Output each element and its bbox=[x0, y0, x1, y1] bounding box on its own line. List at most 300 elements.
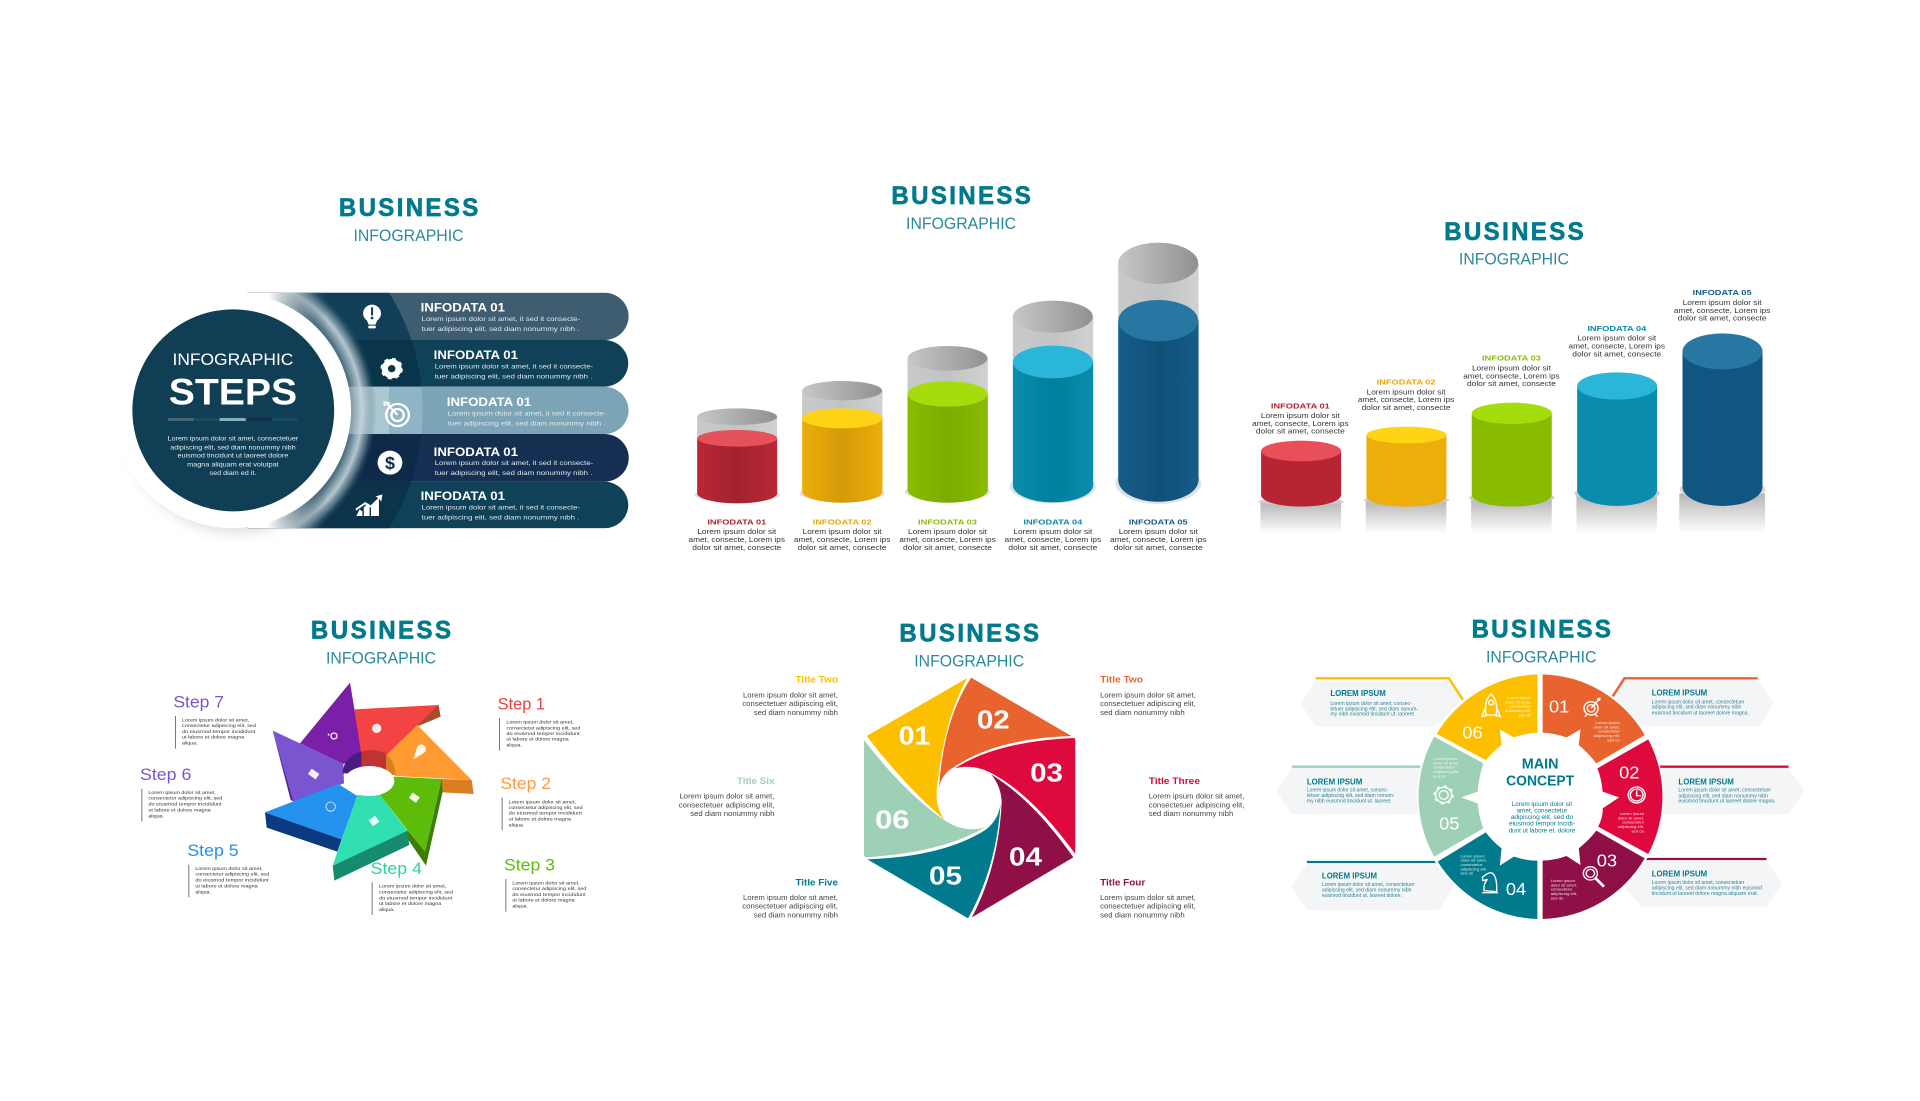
step 5 bbox=[187, 841, 270, 897]
cylinder 3 bbox=[1469, 403, 1555, 533]
mini text 06: sed do bbox=[1519, 712, 1532, 717]
main concept text bbox=[1506, 756, 1576, 834]
step 1: do eiusmod tempor incididunt bbox=[506, 731, 580, 737]
callout: title two left: Title Two bbox=[795, 675, 838, 685]
card: 02: adipiscing elit, sed diam nonummy nibh bbox=[1678, 793, 1768, 799]
icon: target bbox=[384, 401, 409, 426]
mini text 04: consectetur bbox=[1461, 862, 1483, 867]
step 6 bbox=[140, 765, 223, 821]
row 4 text: Lorem ipsum dolor sit amet, it sed it consecte- bbox=[435, 460, 593, 467]
row 5 text: Lorem ipsum dolor sit amet, it sed it consecte- bbox=[422, 505, 580, 512]
step 1: aliqua. bbox=[506, 743, 522, 749]
label 5: INFODATA 05 bbox=[1693, 288, 1752, 297]
card: 05: Lorem ipsum dolor sit amet, consec- bbox=[1307, 788, 1389, 794]
label 3 bbox=[1463, 354, 1560, 388]
wheel bbox=[1417, 673, 1664, 921]
label 3: amet, consecte, Lorem ips bbox=[1463, 372, 1560, 380]
heading: business infographic bbox=[311, 617, 451, 667]
step 2: aliqua. bbox=[509, 822, 524, 828]
centre paragraph: euismod tincidunt ut laoreet dolore bbox=[177, 453, 289, 460]
segment 02 bbox=[1597, 739, 1662, 854]
heading: business infographic bbox=[899, 620, 1039, 670]
step 5: Lorem ipsum dolor sit amet, bbox=[195, 866, 263, 872]
mini text 02: adipiscing elit, bbox=[1618, 824, 1644, 829]
step 3: Lorem ipsum dolor sit amet, bbox=[512, 880, 580, 886]
card: 01 bbox=[1612, 678, 1774, 726]
label 3: amet, consecte, Lorem ips bbox=[899, 535, 996, 544]
panel: seven step pinwheel bbox=[140, 617, 587, 915]
centre paragraph: sed diam ed it. bbox=[210, 470, 257, 477]
row 5 text: tuer adipiscing elit, sed diam nonummy nibh . bbox=[422, 515, 579, 522]
icon: growth chart bbox=[356, 494, 382, 516]
main concept text: adipiscing elit, sed do bbox=[1511, 814, 1574, 821]
label 1: Lorem ipsum dolor sit bbox=[697, 527, 777, 536]
step 4: consectetur adipiscing elit, sed bbox=[379, 889, 453, 895]
label 5: dolor sit amet, consecte bbox=[1114, 543, 1203, 552]
mini text 03 bbox=[1551, 878, 1577, 900]
callout: title six: Title Six bbox=[737, 777, 775, 787]
mini text 04: sed do bbox=[1461, 871, 1474, 876]
band stack bbox=[248, 292, 629, 528]
row 4 text bbox=[434, 445, 593, 477]
row 2 text: INFODATA 01 bbox=[434, 348, 518, 362]
heading: business infographic: BUSINESS bbox=[1444, 218, 1584, 246]
label 2: Lorem ipsum dolor sit bbox=[803, 527, 882, 536]
mini text 04: dolor sit amet, bbox=[1461, 858, 1487, 863]
label 3: INFODATA 03 bbox=[918, 518, 978, 526]
callout: title six: consectetuer adipiscing elit, bbox=[679, 801, 774, 809]
heading: business infographic: INFOGRAPHIC bbox=[1486, 648, 1596, 667]
heading: business infographic: BUSINESS bbox=[891, 182, 1031, 210]
mini text 06: adipiscing elit, bbox=[1505, 708, 1531, 713]
mini text 06: consectetur bbox=[1510, 704, 1532, 709]
hole bbox=[344, 766, 394, 796]
blade sides bbox=[265, 704, 474, 881]
blade: step 4 bbox=[333, 795, 407, 866]
label 1: Lorem ipsum dolor sit bbox=[1261, 411, 1341, 420]
cylinder 2 bbox=[1364, 427, 1449, 533]
step 5: aliqua. bbox=[195, 889, 211, 895]
row 2 text bbox=[434, 348, 593, 380]
mini text 05: dolor sit amet, bbox=[1433, 760, 1460, 765]
mini text 04: Lorem ipsum bbox=[1461, 853, 1485, 858]
centre title: STEPS bbox=[169, 372, 297, 413]
callout: title two left bbox=[742, 675, 838, 717]
mini text 05: Lorem ipsum bbox=[1433, 756, 1458, 761]
mini text 02: dolor sit amet, bbox=[1618, 815, 1644, 820]
icon: dollar: $ bbox=[385, 453, 395, 473]
heading: business infographic: INFOGRAPHIC bbox=[914, 652, 1024, 670]
card: 05: tetuer adipiscing elit, sed diam nonum- bbox=[1307, 793, 1395, 799]
callout: title three: consectetuer adipiscing elit, bbox=[1149, 801, 1244, 809]
step 2 bbox=[500, 774, 583, 830]
centre title: INFOGRAPHIC bbox=[172, 350, 293, 369]
cylinder 1 bbox=[1258, 441, 1344, 533]
card: 02 bbox=[1656, 767, 1804, 814]
callout: title five: Lorem ipsum dolor sit amet, bbox=[743, 893, 838, 902]
step 3: aliqua. bbox=[512, 903, 528, 909]
mini text 02: Lorem ipsum bbox=[1620, 811, 1645, 816]
colour dashes bbox=[168, 418, 298, 421]
row 1 text: Lorem ipsum dolor sit amet, it sed it consecte- bbox=[422, 316, 580, 323]
step 7: ut labore et dolore magna bbox=[182, 735, 245, 741]
callout: title six bbox=[679, 777, 775, 818]
mini text 04 bbox=[1461, 853, 1487, 876]
mini text 01: Lorem ipsum bbox=[1596, 720, 1620, 725]
mini text 04: adipiscing elit, bbox=[1461, 866, 1487, 871]
heading: business infographic bbox=[891, 182, 1031, 233]
segment numbers: 05 bbox=[1439, 814, 1460, 833]
step 3: Step 3 bbox=[504, 856, 555, 875]
callout: title four: Lorem ipsum dolor sit amet, bbox=[1100, 893, 1196, 902]
blade: step 7 bbox=[300, 683, 362, 764]
segment numbers: 04 bbox=[1009, 842, 1042, 871]
label 5: amet, consecte, Lorem ips bbox=[1674, 306, 1770, 315]
row 3 text: INFODATA 01 bbox=[447, 395, 531, 409]
step 6: Step 6 bbox=[140, 765, 191, 784]
step 1: Step 1 bbox=[498, 694, 545, 713]
card: 03: tincidunt ut laoreet dolore magna aliquam erat. bbox=[1652, 891, 1758, 897]
label 1: dolor sit amet, consecte bbox=[692, 543, 782, 552]
cylinder 4 bbox=[1010, 301, 1096, 503]
heading: business infographic: BUSINESS bbox=[899, 620, 1039, 648]
label 4: INFODATA 04 bbox=[1023, 518, 1083, 526]
row 5 text bbox=[421, 489, 580, 522]
label 1: INFODATA 01 bbox=[707, 518, 767, 526]
panel: main concept wheel bbox=[1276, 616, 1804, 921]
card: 03: Lorem ipsum dolor sit amet, consectetuer bbox=[1652, 880, 1745, 886]
segment numbers: 06 bbox=[875, 805, 910, 834]
step 7: Step 7 bbox=[173, 692, 224, 711]
mini text 03: Lorem ipsum bbox=[1551, 878, 1576, 883]
mini text 02 bbox=[1618, 811, 1645, 833]
segment numbers: 05 bbox=[929, 861, 962, 890]
step 7: Lorem ipsum dolor sit amet, bbox=[182, 717, 249, 723]
step 4: do eiusmod tempor incididunt bbox=[379, 895, 453, 901]
step 7 bbox=[173, 692, 256, 749]
step 7: consectetur adipiscing elit, sed bbox=[182, 723, 256, 729]
cylinder 3 bbox=[905, 346, 990, 503]
card: 04: LOREM IPSUM bbox=[1322, 872, 1377, 881]
step 2: Lorem ipsum dolor sit amet, bbox=[509, 799, 576, 805]
heading: business infographic: BUSINESS bbox=[339, 194, 478, 222]
step 3: ut labore et dolore magna bbox=[512, 898, 575, 904]
label 1 bbox=[1252, 402, 1349, 436]
step 6: consectetur adipiscing elit, sed bbox=[148, 796, 223, 802]
segment 04 bbox=[1438, 832, 1537, 919]
cylinder 4 bbox=[1574, 372, 1660, 533]
heading: business infographic: BUSINESS bbox=[311, 617, 451, 644]
callout: title two right: sed diam nonummy nibh bbox=[1100, 708, 1185, 717]
callout: title five: consectetuer adipiscing elit, bbox=[742, 902, 838, 911]
mini text 01 bbox=[1593, 720, 1621, 742]
label 2 bbox=[1358, 378, 1454, 412]
main concept text: eiusmod tempor incidi- bbox=[1509, 821, 1575, 828]
label 3 bbox=[899, 518, 996, 552]
label 5 bbox=[1110, 518, 1206, 552]
step 1 bbox=[498, 694, 581, 751]
label 5: Lorem ipsum dolor sit bbox=[1683, 298, 1762, 307]
step 4: ut labore et dolore magna bbox=[379, 901, 442, 907]
cylinder 5 bbox=[1679, 333, 1765, 533]
card: 01: Lorem ipsum dolor sit amet, consectetuer bbox=[1652, 699, 1745, 705]
card: 06: my nibh euismod tincidunt ut. laoreet bbox=[1330, 712, 1414, 718]
labels bbox=[689, 518, 1206, 552]
label 5: amet, consecte, Lorem ips bbox=[1110, 535, 1206, 544]
row 3 text: tuer adipiscing elit, sed diam nonummy nibh . bbox=[448, 420, 606, 427]
heading: business infographic: INFOGRAPHIC bbox=[353, 226, 464, 245]
label 1: INFODATA 01 bbox=[1271, 402, 1330, 410]
mini text 05: consectetur bbox=[1433, 765, 1456, 770]
mini texts bbox=[1433, 695, 1645, 900]
segment numbers: 04 bbox=[1506, 879, 1526, 899]
callout: title two right: consectetuer adipiscing elit, bbox=[1100, 699, 1196, 708]
row 3 text bbox=[447, 395, 606, 427]
blade icons bbox=[308, 724, 426, 826]
segment numbers: 03 bbox=[1597, 851, 1617, 871]
mini text 01: consectetur bbox=[1598, 729, 1620, 734]
label 1: amet, consecte, Lorem ips bbox=[689, 535, 785, 544]
main concept text: dunt ut labore et. dolore bbox=[1509, 827, 1576, 834]
card: 05: my nibh euismod tincidunt ut. laoreet bbox=[1307, 799, 1391, 805]
icon: target bbox=[1584, 698, 1600, 717]
card: 06: Lorem ipsum dolor sit amet, consec- bbox=[1330, 701, 1412, 707]
segment 02 bbox=[939, 678, 1071, 788]
icon: gear bbox=[1435, 786, 1453, 804]
label 2: INFODATA 02 bbox=[813, 518, 872, 526]
card: 04 bbox=[1291, 862, 1454, 910]
card: 01: adipiscing elit, sed diam nonummy nibh bbox=[1652, 705, 1741, 711]
segment numbers: 01 bbox=[1549, 697, 1569, 716]
segment 05 bbox=[1419, 737, 1483, 857]
callout: title four: sed diam nonummy nibh bbox=[1100, 911, 1185, 919]
label 3: dolor sit amet, consecte bbox=[903, 543, 993, 552]
segment 03 bbox=[955, 738, 1075, 854]
panel: infographic steps bbox=[132, 198, 629, 538]
mini text 03: sed do bbox=[1551, 895, 1564, 900]
segment 04 bbox=[972, 774, 1073, 917]
card: 03 bbox=[1624, 859, 1782, 907]
mini text 01: adipiscing elit, bbox=[1593, 733, 1620, 738]
main concept text: amet, consectetur bbox=[1516, 807, 1567, 814]
card: 05 bbox=[1276, 767, 1424, 814]
row 1 text bbox=[421, 301, 580, 333]
step 2: consectetur adipiscing elit, sed bbox=[509, 805, 583, 811]
step 3: do eiusmod tempor incididunt bbox=[512, 892, 586, 898]
segment numbers bbox=[1439, 697, 1639, 899]
callout: title two left: Lorem ipsum dolor sit amet, bbox=[743, 691, 838, 699]
segment 01 bbox=[1543, 674, 1645, 763]
step 7: do eiusmod tempor incididunt bbox=[182, 729, 256, 735]
circle shadow bbox=[129, 330, 346, 533]
callout: title five: sed diam nonummy nibh bbox=[754, 911, 838, 919]
icon: bulb bbox=[363, 305, 381, 328]
blade: step 3 bbox=[380, 777, 442, 852]
label 1: dolor sit amet, consecte bbox=[1256, 427, 1345, 436]
mini text 03: dolor sit amet, bbox=[1551, 882, 1577, 887]
step 4: Lorem ipsum dolor sit amet, bbox=[379, 884, 446, 890]
mini text 06 bbox=[1505, 695, 1532, 717]
callout: title four: Title Four bbox=[1100, 878, 1145, 888]
step 1: Lorem ipsum dolor sit amet, bbox=[506, 720, 574, 726]
card: 02: LOREM IPSUM bbox=[1678, 778, 1734, 786]
segment numbers: 03 bbox=[1030, 758, 1063, 787]
row 4 text: INFODATA 01 bbox=[434, 445, 518, 459]
mini text 03: adipiscing elit, bbox=[1551, 891, 1577, 896]
segment numbers: 01 bbox=[899, 721, 930, 750]
label 3: INFODATA 03 bbox=[1482, 354, 1542, 363]
heading: business infographic: INFOGRAPHIC bbox=[1459, 249, 1569, 269]
step 7: aliqua. bbox=[182, 741, 198, 747]
label 4: amet, consecte, Lorem ips bbox=[1569, 342, 1665, 351]
label 2: amet, consecte, Lorem ips bbox=[794, 535, 890, 544]
callout: title three bbox=[1149, 777, 1244, 818]
label 4: Lorem ipsum dolor sit bbox=[1577, 334, 1657, 343]
callout: title four bbox=[1100, 878, 1196, 919]
label 2 bbox=[794, 518, 890, 552]
callout: title six: sed diam nonummy nibh bbox=[690, 809, 774, 818]
step 2: do eiusmod tempor incididunt bbox=[509, 811, 583, 817]
mini text 01: sed do bbox=[1607, 737, 1621, 742]
label 4: dolor sit amet, consecte bbox=[1572, 350, 1662, 358]
mini text 02: sed do bbox=[1631, 828, 1645, 833]
card: 04: euismod tincidunt ut. laoreet dolore. bbox=[1322, 893, 1402, 899]
label 4: INFODATA 04 bbox=[1587, 324, 1647, 333]
step 4: aliqua. bbox=[379, 907, 395, 913]
step 4 bbox=[371, 859, 453, 915]
mini text 01: dolor sit amet, bbox=[1593, 724, 1620, 729]
card: 03: LOREM IPSUM bbox=[1652, 870, 1707, 879]
step 5: ut labore et dolore magna bbox=[195, 883, 258, 889]
step 2: Step 2 bbox=[500, 774, 551, 793]
label 2: dolor sit amet, consecte bbox=[1362, 403, 1451, 412]
step 3 bbox=[504, 856, 587, 912]
step 4: Step 4 bbox=[371, 859, 422, 878]
callout: title four: consectetuer adipiscing elit, bbox=[1100, 902, 1196, 911]
icon: rocket bbox=[1482, 694, 1500, 717]
main concept text: CONCEPT bbox=[1506, 773, 1575, 789]
label 5: dolor sit amet, consecte bbox=[1678, 314, 1767, 323]
heading: business infographic bbox=[1472, 616, 1611, 667]
segment numbers: 02 bbox=[1619, 763, 1639, 783]
blade: step 2 bbox=[387, 725, 472, 780]
main concept text: Lorem ipsum dolor sit bbox=[1512, 801, 1572, 808]
callout: title two left: consectetuer adipiscing elit, bbox=[742, 699, 838, 708]
step 6: Lorem ipsum dolor sit amet, bbox=[148, 790, 216, 796]
label 2: dolor sit amet, consecte bbox=[798, 543, 887, 552]
panel: glass cylinders chart bbox=[689, 182, 1206, 552]
callout: title two right bbox=[1100, 675, 1196, 717]
segment 05 bbox=[867, 803, 1001, 918]
card: 06: tetuer adipiscing elit, sed diam nonum- bbox=[1330, 706, 1418, 712]
card: 06: LOREM IPSUM bbox=[1330, 689, 1386, 698]
mini text 03: consectetur bbox=[1551, 887, 1573, 892]
cylinder 5 bbox=[1115, 243, 1201, 504]
callout: title six: Lorem ipsum dolor sit amet, bbox=[680, 792, 774, 801]
mini text 05 bbox=[1433, 756, 1460, 778]
heading: business infographic bbox=[339, 194, 478, 245]
label 3: Lorem ipsum dolor sit bbox=[1472, 364, 1552, 372]
label 5 bbox=[1674, 288, 1770, 323]
white ring bbox=[113, 293, 351, 528]
step 6: aliqua. bbox=[148, 813, 164, 819]
blade: step 6 bbox=[273, 731, 344, 802]
card: 05: LOREM IPSUM bbox=[1307, 778, 1362, 786]
mini text 05: sed do bbox=[1433, 773, 1447, 778]
heading: business infographic: INFOGRAPHIC bbox=[906, 214, 1016, 233]
step 1: ut labore et dolore magna bbox=[506, 737, 569, 743]
label 4 bbox=[1005, 518, 1101, 552]
row 1 text: tuer adipiscing elit, sed diam nonummy nibh . bbox=[422, 326, 579, 333]
callout: title two right: Lorem ipsum dolor sit amet, bbox=[1100, 691, 1196, 699]
step 5: do eiusmod tempor incididunt bbox=[195, 878, 269, 884]
segment 06 bbox=[1437, 674, 1537, 760]
main concept text: MAIN bbox=[1522, 756, 1559, 772]
label 2: amet, consecte, Lorem ips bbox=[1358, 395, 1454, 404]
label 2: Lorem ipsum dolor sit bbox=[1367, 388, 1446, 396]
segment 06 bbox=[864, 740, 985, 857]
hole inner walls bbox=[343, 750, 395, 775]
label 3: dolor sit amet, consecte bbox=[1467, 379, 1557, 388]
centre paragraph: Lorem ipsum dolor sit amet, consectetuer bbox=[168, 436, 299, 443]
row 5 text: INFODATA 01 bbox=[421, 489, 505, 503]
cylinder 1 bbox=[694, 408, 780, 503]
card: 06 bbox=[1301, 678, 1463, 727]
step 6: do eiusmod tempor incididunt bbox=[148, 802, 222, 808]
label 4: dolor sit amet, consecte bbox=[1008, 543, 1098, 552]
panel: hexagon spiral bbox=[679, 620, 1244, 919]
panel: solid cylinders chart bbox=[1252, 218, 1770, 533]
callout: title two right: Title Two bbox=[1100, 675, 1143, 685]
segment numbers: 06 bbox=[1462, 723, 1483, 742]
callout: title two left: sed diam nonummy nibh bbox=[754, 708, 838, 717]
label 1 bbox=[689, 518, 785, 552]
wheel white backing bbox=[1417, 673, 1664, 921]
row 3 text: Lorem ipsum dolor sit amet, it sed it consecte- bbox=[448, 411, 606, 418]
callout: title five bbox=[742, 878, 839, 919]
icon: chess knight bbox=[1482, 873, 1498, 893]
step 6: ut labore et dolore magna bbox=[148, 807, 211, 813]
card: 01: LOREM IPSUM bbox=[1652, 689, 1707, 698]
icon: gear bbox=[382, 359, 401, 378]
card: 01: euismod tincidunt ut laoreet dolore magna. bbox=[1652, 710, 1749, 716]
icon: clock bbox=[1628, 787, 1645, 803]
mini text 05: adipiscing elit, bbox=[1433, 769, 1460, 774]
mini text 06: dolor sit amet, bbox=[1505, 699, 1531, 704]
callout: title three: Lorem ipsum dolor sit amet, bbox=[1149, 792, 1244, 801]
step 2: ut labore et dolore magna bbox=[509, 816, 571, 822]
row 2 text: tuer adipiscing elit, sed diam nonummy nibh . bbox=[435, 373, 593, 380]
callout: title three: Title Three bbox=[1149, 777, 1201, 787]
step 5: Step 5 bbox=[187, 841, 239, 860]
mini text 02: consectetur bbox=[1622, 820, 1645, 825]
segment 03 bbox=[1543, 831, 1645, 919]
row 4 text: tuer adipiscing elit, sed diam nonummy nibh . bbox=[435, 470, 593, 477]
blade: step 5 bbox=[265, 784, 357, 839]
segment 01 bbox=[867, 678, 967, 820]
label 1: amet, consecte, Lorem ips bbox=[1252, 419, 1349, 428]
label 5: Lorem ipsum dolor sit bbox=[1119, 527, 1198, 536]
card: 04: adipiscing elit, sed diam nonummy nibh bbox=[1322, 888, 1412, 894]
step 3: consectetur adipiscing elit, sed bbox=[512, 886, 587, 892]
row 2 text: Lorem ipsum dolor sit amet, it sed it consecte- bbox=[435, 364, 593, 371]
label 4 bbox=[1569, 324, 1665, 358]
callout: title five: Title Five bbox=[795, 878, 839, 888]
dark centre circle bbox=[132, 309, 334, 511]
step 5: consectetur adipiscing elit, sed bbox=[195, 872, 270, 878]
cylinder 2 bbox=[799, 381, 885, 503]
label 3: Lorem ipsum dolor sit bbox=[908, 527, 988, 536]
